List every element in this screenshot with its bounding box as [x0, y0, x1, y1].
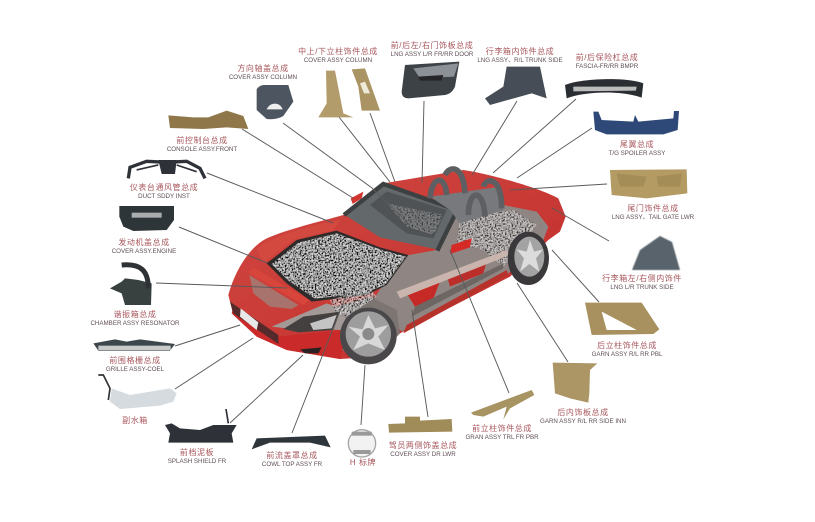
- part: spoiler: [593, 111, 679, 157]
- part: rear inner panel: 后内饰板总成: [557, 407, 609, 417]
- part: coolant tank: 副水箱: [122, 415, 148, 425]
- part: instrument duct: DUCT SDDY INST: [138, 193, 190, 200]
- part: splash shield: SPLASH SHIELD FR: [168, 458, 227, 465]
- rear mechanical detail: [457, 210, 537, 267]
- part: trunk side lower: LNG L/R TRUNK SIDE: [610, 284, 674, 291]
- part: door panel: LNG ASSY L/R FR/RR DOOR: [391, 51, 474, 58]
- part: cowl top: COWL TOP ASSY FR: [262, 461, 323, 468]
- part: tail gate: LNG ASSY、TAIL GATE LWR: [612, 214, 695, 221]
- wing mirror: [351, 192, 363, 204]
- part: engine cover: [112, 206, 176, 255]
- part: rear inner panel: [540, 363, 626, 425]
- part: H badge: H 标牌: [350, 457, 376, 467]
- part: instrument duct: [128, 160, 205, 200]
- part: rear pillar trim: [585, 303, 663, 358]
- part: tail gate: 尾门饰件总成: [627, 203, 679, 213]
- part: steering column cover: COVER ASSY COLUMN: [229, 74, 297, 81]
- part: door lower cover: COVER ASSY DR LWR: [390, 451, 456, 458]
- part: column pillars: [298, 46, 380, 117]
- part: bumper fascia: FASCIA-FR/RR BMPR: [576, 63, 639, 70]
- car body: [228, 170, 566, 359]
- headlight: [283, 312, 340, 332]
- part: cowl top: 前流盖罩总成: [266, 450, 318, 460]
- sill and side panels: [397, 238, 510, 333]
- rear deck cutaway: [373, 205, 548, 332]
- front highlight of hood: [257, 220, 340, 263]
- part: instrument duct: 仪表台通风管总成: [130, 182, 198, 192]
- part: trunk side trim: [477, 46, 563, 105]
- engine bay lower detail: [330, 288, 377, 317]
- front fender: [272, 303, 347, 330]
- leader lines: [156, 99, 609, 433]
- part: tail gate: [610, 169, 695, 221]
- front wheel: [340, 308, 397, 364]
- car illustration: [228, 169, 566, 364]
- part: trunk side lower: [602, 236, 682, 291]
- number plate: [240, 308, 258, 330]
- rear wheel: [508, 232, 549, 285]
- part: door panel: [391, 40, 474, 98]
- bumper vent: [300, 347, 322, 353]
- part: front pillar trim: GRAN ASSY TRL FR PBR: [465, 434, 539, 441]
- part: coolant tank: [98, 375, 177, 425]
- part: grille: 前围格栅总成: [109, 355, 161, 365]
- front wheel arch: [337, 297, 400, 357]
- part: trunk side trim: LNG ASSY、R/L TRUNK SIDE: [477, 57, 563, 64]
- front bumper: [232, 307, 347, 359]
- part: front pillar trim: 前立柱饰件总成: [472, 423, 532, 433]
- part: resonator chamber: 谐振箱总成: [114, 309, 156, 319]
- part: door lower cover: [388, 417, 457, 458]
- red hood underside: [249, 275, 298, 309]
- part: steering column cover: 方向轴盖总成: [237, 63, 289, 73]
- part: rear pillar trim: 后立柱饰件总成: [597, 340, 657, 350]
- part: bumper fascia: 前/后保险杠总成: [576, 52, 638, 62]
- part: column pillars: COVER ASSY COLUMN: [304, 57, 372, 64]
- seat backs: [430, 187, 503, 223]
- part: cowl top: [252, 436, 331, 468]
- part: spoiler: T/G SPOILER ASSY: [609, 150, 665, 157]
- part: trunk side trim: 行李箱内饰件总成: [486, 46, 554, 56]
- part: front console: CONSOLE ASSY.FRONT: [167, 146, 237, 153]
- part: front console: 前控制台总成: [176, 135, 228, 145]
- black lower grille: [230, 302, 278, 344]
- part: front pillar trim: [465, 390, 539, 441]
- part: trunk side lower: 行李箱左/右侧内饰件: [602, 273, 682, 283]
- part: grille: GRILLE ASSY-COEL: [106, 366, 165, 373]
- part: spoiler: 尾翼总成: [620, 139, 654, 149]
- engine detail: [272, 233, 406, 299]
- part: door panel: 前/后左/右门饰板总成: [391, 40, 473, 50]
- part: front console: [167, 111, 248, 153]
- engine bay: [267, 231, 408, 302]
- part: door lower cover: 驾员两侧饰盖总成: [389, 440, 457, 450]
- part: rear pillar trim: GARN ASSY R/L RR PBL: [592, 351, 663, 358]
- part: rear inner panel: GARN ASSY R/L RR SIDE INN: [540, 418, 626, 425]
- part: column pillars: 中上/下立柱饰件总成: [298, 46, 378, 56]
- part: resonator chamber: CHAMBER ASSY RESONATOR: [90, 320, 180, 327]
- part: grille: [93, 339, 175, 373]
- part: H badge: [348, 430, 376, 467]
- windscreen and cockpit: [345, 184, 457, 249]
- part: bumper fascia: [565, 52, 643, 98]
- part: resonator chamber: [90, 265, 180, 327]
- part: engine cover: 发动机盖总成: [118, 237, 170, 247]
- part: splash shield: [165, 409, 237, 465]
- part: engine cover: COVER ASSY.ENGINE: [112, 248, 176, 255]
- seats and roll hoops: [430, 169, 502, 217]
- part: splash shield: 前档泥板: [180, 447, 214, 457]
- windscreen frame: [344, 184, 457, 251]
- part: steering column cover: [229, 63, 297, 119]
